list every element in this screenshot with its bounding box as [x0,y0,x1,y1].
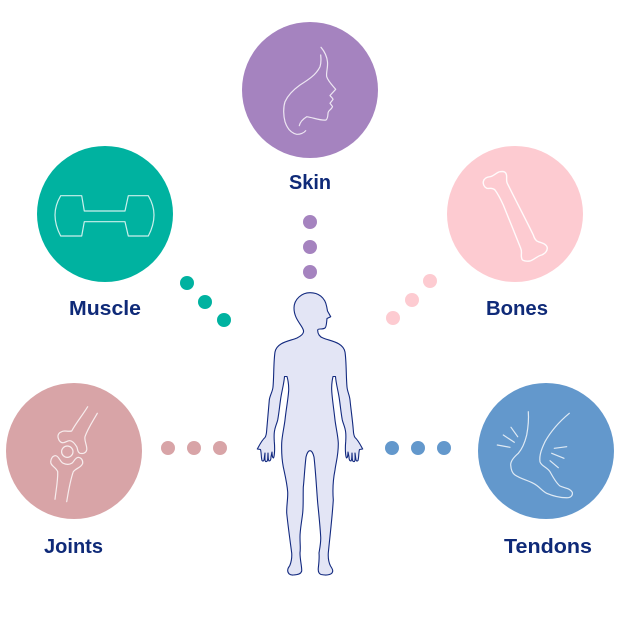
label: Skin: Skin [289,171,331,194]
icon: dumbbell [55,196,154,236]
dots: bones connector [386,274,437,325]
panel: muscle [37,146,173,320]
dots: tendons connector [385,441,451,455]
label: Bones: Bones [486,297,548,320]
icon: knee joint [51,407,97,502]
label: Muscle: Muscle [69,297,141,320]
muscle circle [37,146,173,282]
joints circle [6,383,142,519]
icon: foot with tendon lines [497,412,572,498]
label: Tendons: Tendons [504,535,592,558]
icon: bone [483,171,547,261]
label: Joints: Joints [44,535,103,558]
panel: bones [447,146,583,320]
icon: face profile [284,47,336,134]
panel: joints [6,383,142,558]
bones circle [447,146,583,282]
dots: joints connector [161,441,227,455]
panel: tendons [478,383,614,558]
human body figure [257,293,363,575]
dots: skin connector [303,215,317,279]
panel: skin [242,22,378,194]
tendons circle [478,383,614,519]
skin circle [242,22,378,158]
dots: muscle connector [180,276,231,327]
